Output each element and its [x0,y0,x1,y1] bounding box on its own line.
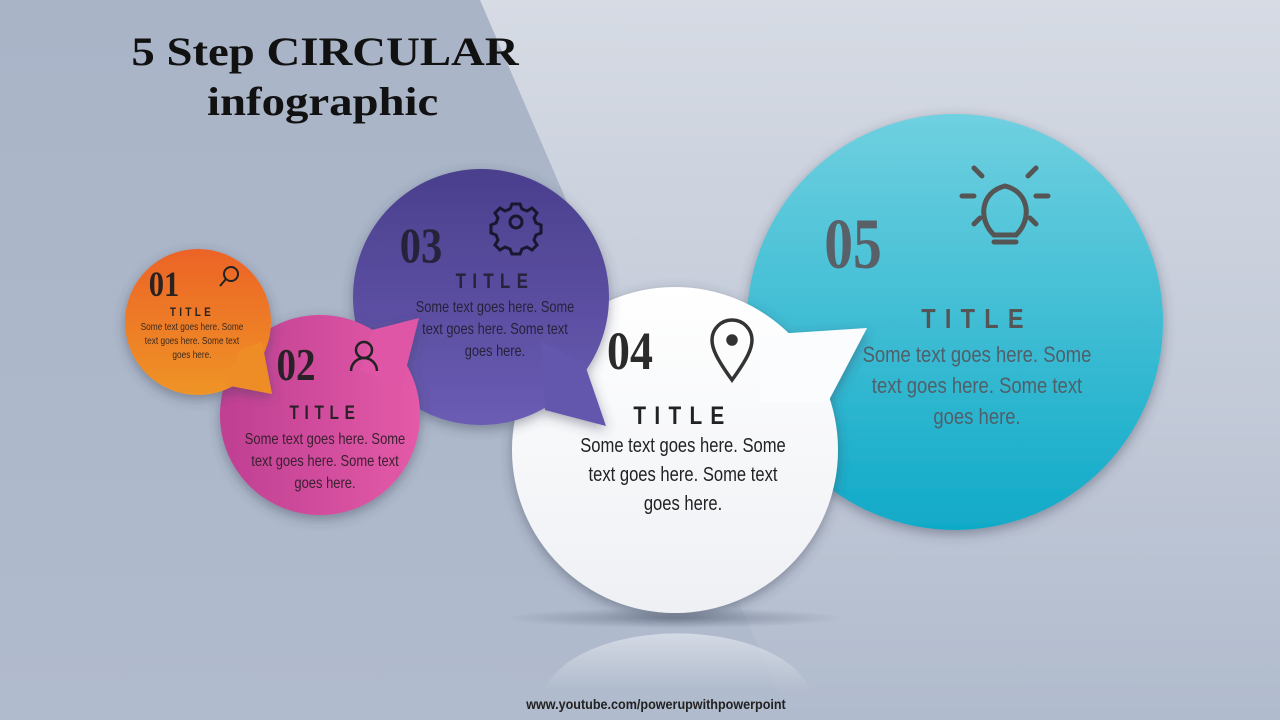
step 5 content: text goes here. Some text [872,375,1083,398]
step 4 content: Some text goes here. Some [580,434,786,456]
step 2 content [245,340,405,492]
step 2 content: Some text goes here. Some [245,431,405,448]
step 5 content: Some text goes here. Some [863,344,1091,367]
step 2 content: goes here. [294,475,356,492]
step 5 content: 05 [824,205,882,285]
step 3 content [400,204,574,360]
step 3 content: TITLE [456,270,534,294]
bubble 2 [220,315,420,515]
step 4 content: text goes here. Some text [589,463,777,485]
step 5 content [824,168,1091,429]
step 1 content: text goes here. Some text [145,335,240,346]
reflection under step 4 [505,608,845,690]
icon: user [351,342,377,371]
step 2 content: 02 [276,340,316,391]
title: 5 Step CIRCULAR [131,30,519,74]
footer url: www.youtube.com/powerupwithpowerpoint [525,696,786,712]
title [131,30,519,124]
bubble 3 [353,169,609,426]
step 4 content [580,320,786,514]
bubble 4 [512,287,867,613]
icon: map pin [712,320,752,380]
step 1 content: 01 [149,265,179,305]
step 4 content: TITLE [633,401,733,429]
step 3 content: Some text goes here. Some [416,299,574,316]
step 2 content: text goes here. Some text [251,453,399,470]
title: infographic [207,80,438,124]
bubble 5 [747,114,1163,530]
step 2 content: TITLE [289,401,361,423]
icon: light bulb [962,168,1048,242]
icon: search [220,267,238,286]
step 1 content [141,265,243,360]
step 1 content: TITLE [170,306,214,319]
step 1 content: Some text goes here. Some [141,321,243,332]
step 3 content: 03 [400,219,442,274]
step 3 content: text goes here. Some text [422,321,568,338]
step 4 content: 04 [607,321,653,381]
step 5 content: goes here. [933,406,1021,429]
icon: gear [491,204,541,254]
step 4 content: goes here. [644,492,722,514]
step 5 content: TITLE [921,304,1033,334]
step 1 content: goes here. [172,349,212,360]
step 3 content: goes here. [465,343,525,360]
bubble 1 [125,249,272,395]
